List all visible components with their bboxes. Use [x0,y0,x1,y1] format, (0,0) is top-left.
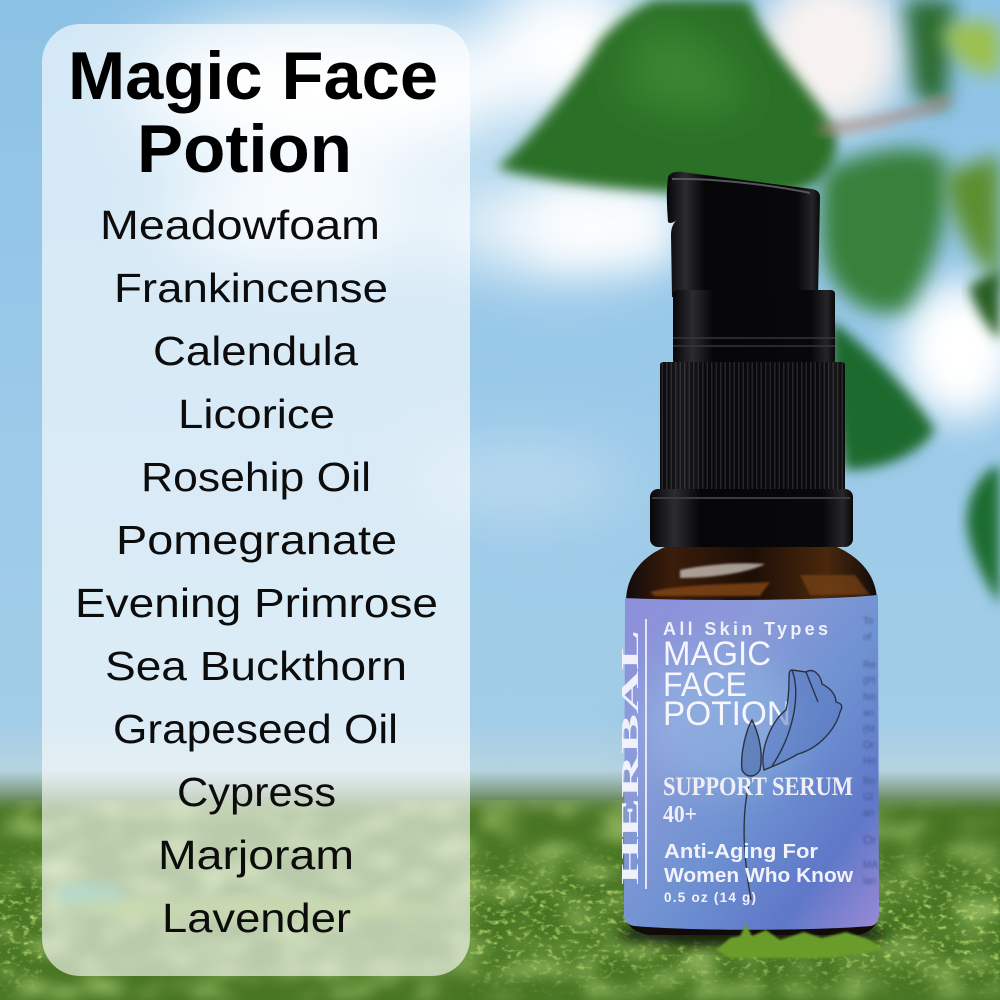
ingredient list [75,202,438,941]
moss in front of bottle [716,924,884,958]
heading [68,38,438,187]
label text: claim: Anti-Aging For [664,841,818,863]
ingredient list: Rosehip Oil [141,454,371,500]
label text: side panel: MA [863,860,878,871]
label text: product name: FACE [663,666,747,704]
label text: side panel: Or [863,833,876,847]
ingredient list: Frankincense [114,265,388,311]
ingredient list: Evening Primrose [75,580,438,626]
ingredient list: Cypress [177,769,336,815]
label text: product name: MAGIC [663,635,771,673]
label text: side panel: lan [863,876,876,887]
label text: serum [663,772,853,828]
label text: serum: SUPPORT SERUM [663,772,853,801]
foliage: blurred leaves [497,0,1000,605]
ingredient list: Calendula [153,328,358,374]
heading: Magic Face [68,38,438,114]
panel: ingredients card [42,24,470,976]
ingredient list: Sea Buckthorn [105,643,407,689]
label text: size: 0.5 oz (14 g) [664,890,756,905]
ingredient list: Lavender [162,895,351,941]
label text: brand: HERBAL [618,630,644,885]
label text: side panel: Ho [863,756,876,767]
label text: side panel: Re [863,660,876,671]
label text: side panel: Bo [863,776,876,787]
icon: flower line drawing [742,670,842,900]
label text: side panel: (M [863,724,875,735]
cap base [650,489,853,547]
label text: side panel: (Pl [863,676,875,687]
bottle shadow on moss [617,921,887,947]
ingredient list: Pomegranate [116,517,397,563]
ingredient list: Grapeseed Oil [113,706,398,752]
ingredient list: Marjoram [158,832,354,878]
label text: product name [663,635,791,733]
label text: side panel: an [863,708,874,719]
pump collar [673,290,835,364]
label text: side panel: an [863,808,874,819]
label text: serum: 40+ [663,802,697,828]
label text: product name: POTION [663,695,791,733]
label text: claim [664,841,853,887]
label rule [645,619,647,889]
heading: Potion [137,111,352,187]
pump nozzle [667,172,820,297]
label [624,595,879,930]
ribbed cap [660,362,845,492]
label text: skin types: All Skin Types [663,619,828,639]
label text: side panel: Or [863,740,875,751]
ingredient list: Meadowfoam [100,202,380,248]
label text: side panel [863,616,878,887]
label text: claim: Women Who Know [664,865,853,887]
label text: side panel: No [863,692,876,703]
amber glass [626,547,877,642]
moss ground [0,800,1000,1000]
label text: side panel: Gl [863,792,873,803]
label text: side panel: To [863,616,874,627]
ingredient list: Licorice [178,391,335,437]
product: serum bottle [617,172,887,958]
label text: side panel: of [863,632,872,643]
